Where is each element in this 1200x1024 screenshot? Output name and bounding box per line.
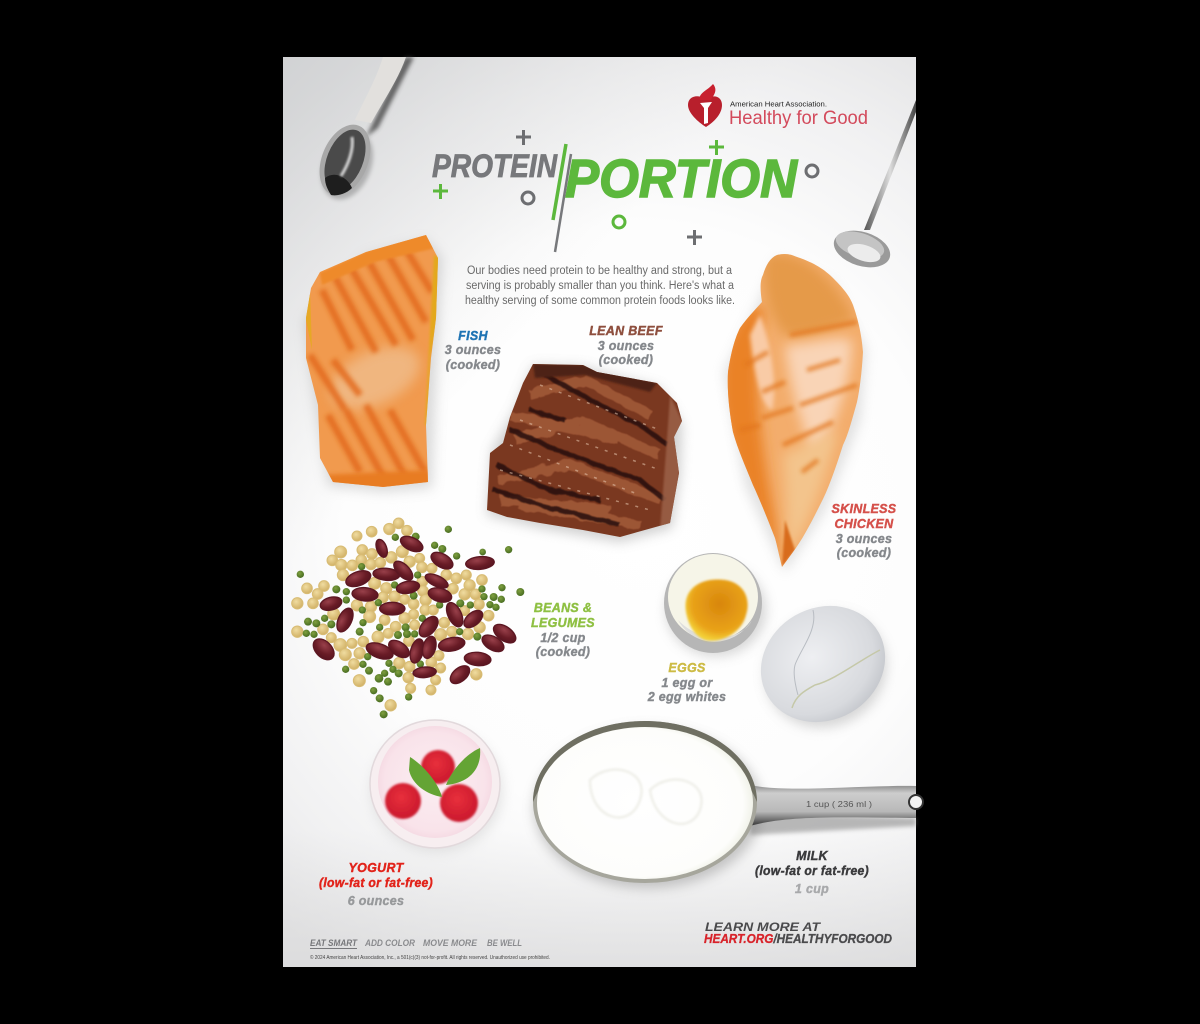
footer navigation: EAT SMART: [310, 938, 358, 948]
label: milk: (low-fat or fat-free): [755, 864, 869, 878]
label: skinless chicken: 3 ounces: [836, 532, 892, 546]
label: eggs: 2 egg whites: [647, 690, 726, 704]
infographic poster canvas: [283, 56, 924, 967]
label: skinless chicken: [832, 502, 897, 560]
learn more call to action: HEART.ORG/HEALTHYFORGOOD: [704, 931, 893, 946]
label: skinless chicken: SKINLESS: [832, 502, 897, 516]
learn more call to action: LEARN MORE AT: [705, 922, 821, 934]
label: lean beef: (cooked): [599, 353, 653, 367]
label: beans and legumes: (cooked): [536, 645, 590, 659]
label: skinless chicken: (cooked): [837, 546, 891, 560]
intro text: [465, 265, 735, 307]
learn more call to action: [704, 922, 893, 946]
decorative plus and circle marks: [433, 130, 818, 245]
measuring cup handle: 1 cup ( 236 ml ): [806, 799, 872, 809]
logo: American Heart Association Healthy for Good: American Heart Association.: [730, 102, 827, 108]
food: whole cracked egg: [740, 584, 908, 749]
icon: meat thermometer: [829, 100, 916, 274]
label: skinless chicken: CHICKEN: [834, 517, 894, 531]
title: Protein Portion: [432, 144, 798, 252]
copyright: © 2024 American Heart Association, Inc., a 501(c)(3) not-for-profit. All rights reserved. Unauthorized use prohibited.: [310, 954, 550, 961]
label: eggs: [647, 661, 726, 704]
logo: American Heart Association Healthy for Good: Healthy for Good: [729, 108, 868, 129]
poster background: [283, 57, 916, 967]
footer navigation: BE WELL: [487, 938, 522, 948]
food: salmon fillet: [300, 230, 445, 492]
icon: measuring spoon: [310, 57, 414, 207]
footer navigation: MOVE MORE: [423, 938, 478, 948]
label: lean beef: LEAN BEEF: [589, 324, 663, 338]
label: fish: (cooked): [446, 358, 500, 372]
label: beans and legumes: BEANS &: [534, 601, 592, 615]
label: fish: 3 ounces: [445, 343, 501, 357]
intro text: serving is probably smaller than you think. Here's what a: [466, 280, 735, 292]
footer navigation: [310, 938, 522, 949]
measuring cup handle: [750, 785, 923, 835]
label: lean beef: 3 ounces: [598, 339, 654, 353]
label: fish: [445, 329, 501, 372]
label: yogurt: (low-fat or fat-free): [319, 876, 433, 890]
intro text: healthy serving of some common protein foods looks like.: [465, 295, 735, 307]
food: soft boiled egg half: [664, 553, 766, 656]
label: yogurt: 6 ounces: [348, 894, 404, 908]
logo: American Heart Association Healthy for Good: [688, 84, 868, 129]
label: eggs: EGGS: [668, 661, 706, 675]
label: milk: 1 cup: [795, 882, 829, 896]
label: milk: [755, 849, 869, 896]
label: yogurt: YOGURT: [348, 861, 405, 875]
food: beans and legumes: [292, 518, 524, 718]
footer navigation: ADD COLOR: [364, 938, 415, 948]
food: measuring cup of milk: [533, 721, 923, 888]
intro text: Our bodies need protein to be healthy and strong, but a: [467, 265, 733, 277]
label: beans and legumes: LEGUMES: [531, 616, 595, 630]
label: milk: MILK: [796, 849, 829, 863]
food: grilled steak: [480, 360, 690, 545]
food: yogurt with raspberries: [370, 720, 503, 852]
title: Protein Portion: PROTEIN: [432, 148, 558, 184]
label: lean beef: [589, 324, 663, 367]
title: Protein Portion: PORTION: [565, 149, 798, 209]
label: beans and legumes: 1/2 cup: [540, 631, 586, 645]
label: eggs: 1 egg or: [661, 676, 713, 690]
food: grilled chicken breast: [720, 250, 870, 572]
label: yogurt: [319, 861, 433, 908]
label: beans and legumes: [531, 601, 595, 659]
icon: heart and torch: [688, 84, 722, 127]
label: fish: FISH: [458, 329, 489, 343]
